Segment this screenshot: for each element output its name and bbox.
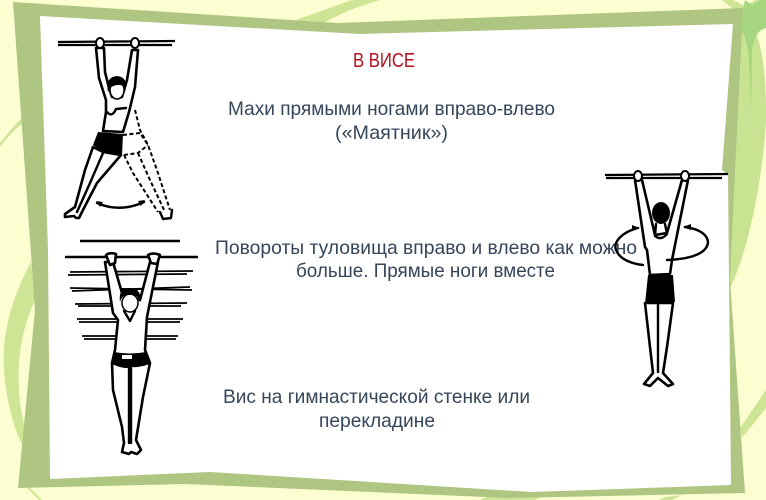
text block: torso turns: больше. Прямые ноги вместе [296,260,555,282]
text block: hang on wall bars [223,386,530,432]
figure: leg swings while hanging from a bar [58,38,175,219]
text block: torso turns [215,237,637,282]
text block: hang on wall bars: Вис на гимнастической стенке или [223,386,530,408]
text block: pendulum: Махи прямыми ногами вправо-влево [228,98,555,120]
text block: hang on wall bars: перекладине [319,410,435,432]
text block: pendulum: («Маятник») [335,122,448,144]
figure: hang on gymnastic wall bars [65,241,198,454]
title: В ВИСЕ [353,50,415,72]
text block: pendulum [228,98,555,144]
text block: torso turns: Повороты туловища вправо и влево как можно [215,237,637,259]
figure: torso turns while hanging [605,171,728,386]
